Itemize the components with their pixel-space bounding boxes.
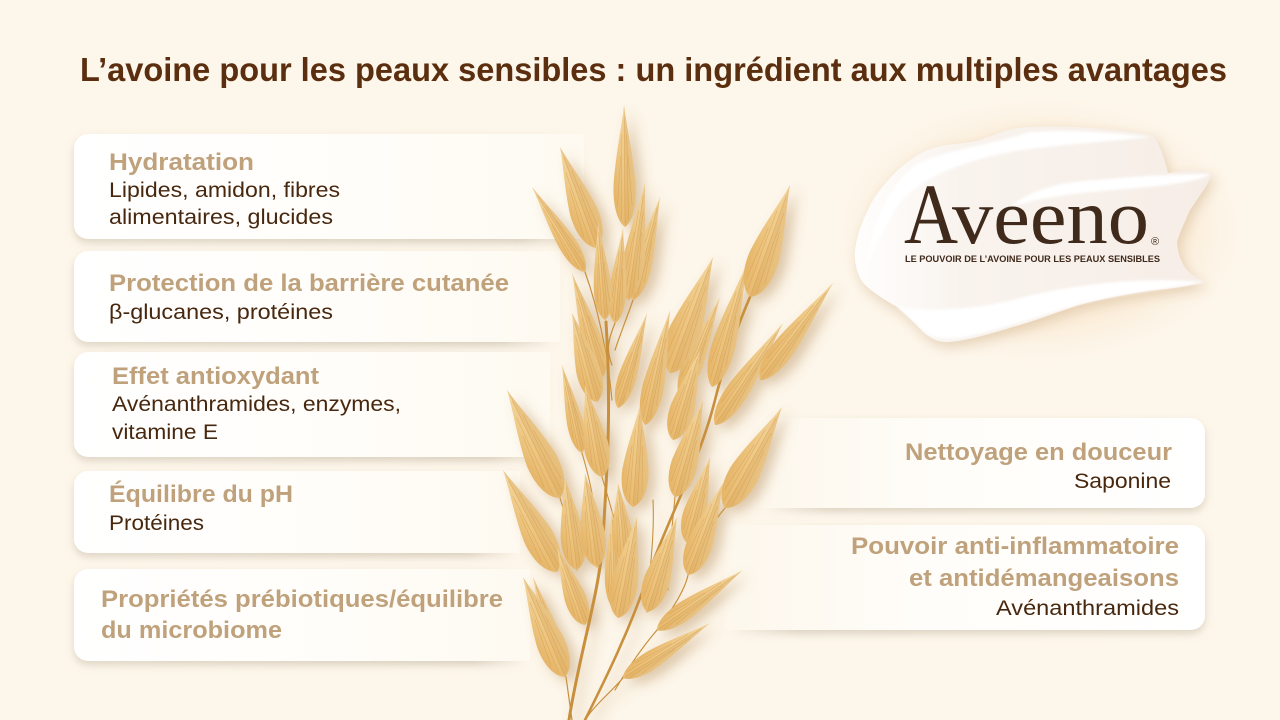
panel: antioxidant (74, 352, 550, 461)
heading: prebiotic properties: Propriétés prébiotiques/équilibre (101, 586, 503, 613)
text: cleansing ingredient: Saponine (1074, 470, 1171, 493)
panel: pH balance (74, 471, 520, 557)
text: antioxidant ingredients (112, 393, 401, 444)
text: antioxidant ingredients: vitamine E (112, 421, 218, 444)
panel: anti-inflammatory (725, 525, 1205, 634)
registered mark: ® (1151, 236, 1159, 248)
logo wordmark: veeno (952, 173, 1149, 260)
heading: anti-inflammatory: Pouvoir anti-inflammatoire (851, 533, 1179, 560)
heading: barrier protection: Protection de la barrière cutanée (109, 270, 509, 297)
heading: prebiotic properties: du microbiome (101, 617, 282, 644)
text: hydratation ingredients (109, 179, 340, 229)
logo tagline: LE POUVOIR DE L’AVOINE POUR LES PEAUX SENSIBLES (905, 254, 1160, 265)
logo wordmark: A (904, 166, 958, 262)
text: antioxidant ingredients: Avénanthramides, enzymes, (112, 393, 401, 416)
heading: gentle cleansing: Nettoyage en douceur (905, 439, 1172, 466)
panel: prebiotic properties (74, 569, 530, 665)
text: hydratation ingredients: alimentaires, glucides (109, 206, 333, 229)
heading: anti-inflammatory (851, 533, 1179, 592)
text: pH ingredients: Protéines (109, 512, 204, 535)
heading: prebiotic properties (101, 586, 503, 644)
panel: gentle cleansing (760, 418, 1205, 512)
illustration: oat sprig (490, 105, 842, 720)
text: barrier ingredients: β-glucanes, protéines (109, 301, 333, 324)
cream smear (855, 127, 1212, 342)
heading: hydratation: Hydratation (109, 149, 254, 176)
panel: barrier protection (74, 251, 560, 346)
heading: anti-inflammatory: et antidémangeaisons (909, 565, 1179, 592)
panel: hydratation (74, 134, 584, 243)
grains (490, 105, 842, 686)
title: L’avoine pour les peaux sensibles : un ingrédient aux multiples avantages (80, 51, 1227, 88)
heading: antioxidant: Effet antioxydant (112, 363, 319, 390)
text: hydratation ingredients: Lipides, amidon, fibres (109, 179, 340, 202)
cream swatch with logo (825, 90, 1255, 370)
stems (560, 272, 750, 720)
logo wordmark (904, 166, 1149, 262)
heading: pH balance: Équilibre du pH (109, 480, 293, 508)
text: anti-inflammatory ingredient: Avénanthramides (996, 597, 1179, 620)
